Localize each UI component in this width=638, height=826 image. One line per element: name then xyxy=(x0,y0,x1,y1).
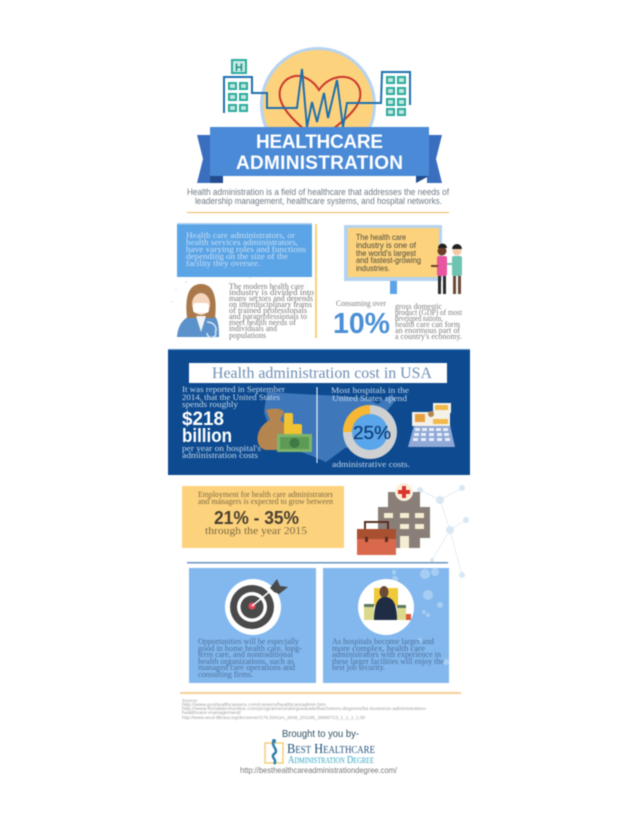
text: modern health care xyxy=(229,282,314,340)
text: hospitals spend: administrative costs. xyxy=(332,460,410,469)
billboard text: industries. xyxy=(356,263,390,273)
logo wordmark xyxy=(287,742,375,766)
donut chart xyxy=(343,405,397,459)
through the year: through the year 2015 xyxy=(205,525,308,537)
sources: http://www.oecd-ilibrary.org/docserver/179,3341en_2649_201185_38980713_1_1_1_1,00 xyxy=(182,715,366,720)
text: modern health care: of trained professionals xyxy=(229,306,307,315)
security text xyxy=(332,637,444,672)
opportunities text: consulting firms. xyxy=(198,670,253,679)
icon: masked doctor xyxy=(177,284,219,338)
logo xyxy=(265,739,375,766)
icon: briefcase xyxy=(357,522,396,555)
title ribbon xyxy=(197,127,442,183)
icon: target xyxy=(225,579,288,635)
title: HEALTHCARE xyxy=(256,132,383,153)
header illustration xyxy=(224,47,410,163)
logo wordmark: Best Healthcare xyxy=(287,742,375,757)
icon: hospital sign xyxy=(231,59,247,74)
sources: healthcare-management/ xyxy=(182,710,242,715)
text: 218 billion: 2014, that the United States xyxy=(182,393,280,402)
sources: http://www.poshealthcareers.com/careers/healthcareadmin.htm xyxy=(182,702,326,707)
panel: billboard xyxy=(344,225,442,294)
text: modern health care: many sectors and depends xyxy=(229,294,313,303)
stat text: developed nations, xyxy=(395,314,443,323)
text block: depending on the size of the xyxy=(186,252,288,261)
icon: administrator at desk xyxy=(358,579,414,635)
panel: job security xyxy=(323,568,449,683)
opportunities text: health organizations, such as xyxy=(198,657,294,666)
panel: employment growth xyxy=(182,486,344,548)
text block xyxy=(186,231,306,268)
map of USA xyxy=(264,392,396,462)
text: modern health care: industry is divided into xyxy=(229,288,314,297)
title: ADMINISTRATION xyxy=(236,153,403,174)
billboard text: industry is one of xyxy=(356,240,417,250)
text: modern health care: individuals and xyxy=(229,324,277,333)
intro text: leadership management, healthcare systems, and hospital networks. xyxy=(195,196,442,206)
opportunities text: term care, and nontraditional xyxy=(198,650,294,659)
icon: left building windows xyxy=(229,83,247,111)
logo wordmark: Administration Degree xyxy=(288,754,374,766)
text: 218 billion: administration costs xyxy=(182,451,258,460)
text: modern health care: meet health needs of xyxy=(229,318,296,327)
credit line: Brought to you by- xyxy=(282,728,359,740)
employment text: and managers is expected to grow between xyxy=(198,497,333,506)
panel: administrators roles xyxy=(177,223,312,277)
billboard text: the world's largest xyxy=(356,248,417,258)
text block: have varying roles and functions xyxy=(186,245,306,254)
security text: these larger facilities will enjoy the xyxy=(332,657,444,666)
icon: money xyxy=(257,409,312,452)
section heading: Health administration cost in USA xyxy=(212,365,432,382)
text: 218 billion: It was reported in September xyxy=(182,385,285,394)
stat: 10 percent GDP xyxy=(333,299,463,341)
employment text xyxy=(198,490,333,506)
text: 218 billion: $218 xyxy=(182,409,224,430)
opportunities text: managed care operations and xyxy=(198,663,295,672)
text block: health services administrators, xyxy=(186,238,298,247)
panel: opportunities xyxy=(189,568,316,683)
text: 218 billion: billion xyxy=(182,426,232,447)
heartbeat line xyxy=(224,69,410,127)
stat text: health care can form xyxy=(395,320,461,329)
donut chart: 25% xyxy=(353,423,391,443)
opportunities text xyxy=(198,637,302,679)
big number: 10% xyxy=(333,308,390,340)
security text: administrators with experience in xyxy=(332,650,441,659)
icon: heart xyxy=(280,76,360,140)
employment text: Employment for health care administrators xyxy=(198,490,333,499)
billboard text: The health care xyxy=(356,232,406,242)
icon: two people xyxy=(431,244,462,294)
stat text: a country's economy. xyxy=(395,332,462,341)
text: modern health care: The modern health care xyxy=(229,282,304,291)
icon: cash register xyxy=(408,403,455,447)
text: 218 billion: spends roughly xyxy=(182,400,238,409)
text: 218 billion xyxy=(182,385,285,460)
text: hospitals spend: Most hospitals in the xyxy=(331,386,410,395)
stat text: an enormous part of xyxy=(395,326,460,335)
text: modern health care: populations xyxy=(229,331,266,340)
security text: best job security. xyxy=(332,663,385,672)
intro text xyxy=(187,187,449,206)
title xyxy=(236,132,403,174)
stat text xyxy=(395,302,463,341)
icon: logo mark xyxy=(265,739,283,764)
text: modern health care: on interdisciplinary teams xyxy=(229,300,312,309)
text: modern health care: and paraprofessionals to xyxy=(229,312,307,321)
sources xyxy=(182,698,428,720)
icon: hospital xyxy=(378,483,430,548)
sun circle xyxy=(260,47,376,163)
icon: hospital sign: H xyxy=(235,62,243,74)
text: hospitals spend xyxy=(331,386,410,469)
panel: administration cost xyxy=(168,349,470,475)
opportunities text: good in home health care, long- xyxy=(198,644,302,653)
stat: 10 percent GDP: Consuming over xyxy=(336,299,386,308)
sources: Source: xyxy=(182,698,198,703)
text: 218 billion: per year on hospital's xyxy=(182,444,261,453)
security text: As hospitals become larger and xyxy=(332,637,434,646)
stat text: product (GDP) of most xyxy=(395,308,463,317)
billboard text xyxy=(356,232,421,273)
opportunities text: Opportunities will be especially xyxy=(198,637,299,646)
text: hospitals spend: United States spend xyxy=(332,394,407,403)
stat text: gross domestic xyxy=(395,302,442,311)
billboard text: and fastest-growing xyxy=(356,255,421,265)
growth figure: 21% - 35% xyxy=(214,508,299,528)
text block: facility they oversee. xyxy=(186,259,260,268)
intro text: Health administration is a field of healthcare that addresses the needs of xyxy=(187,187,449,197)
icon: right building windows xyxy=(387,77,405,115)
security text: more complex, health care xyxy=(332,644,425,653)
text block: Health care administrators, or xyxy=(186,231,295,240)
url: http://besthealthcareadministrationdegree.com/ xyxy=(240,765,398,775)
sources: http://www.floridatechonline.com/programs/undergraduate/bachelors-degrees/bs-business-administration- xyxy=(182,706,428,711)
